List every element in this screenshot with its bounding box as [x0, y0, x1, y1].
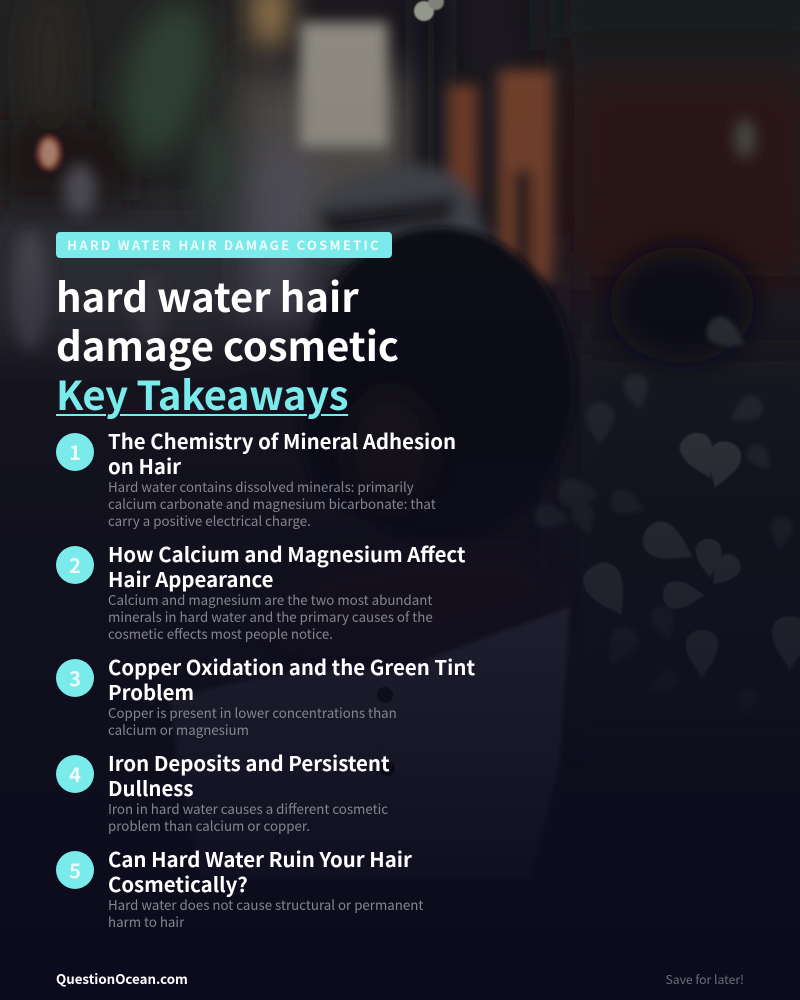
footer brand: QuestionOcean.com [56, 969, 188, 988]
takeaway 4: Iron Deposits and Persistent [108, 747, 390, 777]
takeaway 5: 5 [69, 855, 81, 884]
takeaway 4: Iron in hard water causes a different cosmetic [108, 799, 388, 818]
takeaway 1: 1 [69, 437, 81, 466]
takeaway 5 [56, 843, 424, 931]
face and skin [270, 390, 570, 650]
takeaway 3 [56, 651, 475, 739]
takeaway 4: Dullness [108, 772, 194, 802]
takeaway 5: Cosmetically? [108, 868, 248, 898]
takeaway 2: minerals in hard water and the primary causes of the [108, 607, 433, 626]
bokeh lights [414, 0, 444, 21]
shirt buttons [377, 687, 395, 776]
takeaway 4: problem than calcium or copper. [108, 816, 310, 835]
hair [300, 227, 575, 543]
takeaway 2: 2 [69, 550, 81, 579]
takeaway 1: calcium carbonate and magnesium bicarbonate: that [108, 494, 436, 513]
footer save note: Save for later! [665, 970, 744, 988]
takeaway 2: Hair Appearance [108, 563, 274, 593]
title: hard water hair [56, 266, 359, 324]
title: Key Takeaways [56, 364, 348, 422]
red light [36, 135, 62, 171]
takeaway 3: calcium or magnesium [108, 720, 249, 739]
takeaway 3: 3 [69, 663, 81, 692]
takeaway 4: 4 [69, 759, 81, 788]
takeaway 5: Hard water does not cause structural or permanent [108, 895, 423, 914]
takeaway 1: The Chemistry of Mineral Adhesion [108, 425, 456, 455]
takeaway 3: Problem [108, 676, 194, 706]
dim leaves [532, 312, 794, 717]
takeaway 1: carry a positive electrical charge. [108, 511, 311, 530]
dark bush [610, 247, 754, 363]
takeaway 2: Calcium and magnesium are the two most abundant [108, 590, 432, 609]
title: damage cosmetic [56, 315, 399, 373]
takeaway 3: Copper is present in lower concentrations than [108, 703, 397, 722]
takeaway 2: cosmetic effects most people notice. [108, 624, 333, 643]
takeaway 5: Can Hard Water Ruin Your Hair [108, 843, 412, 873]
takeaway 1: on Hair [108, 450, 181, 480]
takeaway 5: harm to hair [108, 912, 184, 931]
takeaway 1 [56, 425, 456, 530]
takeaway 1: Hard water contains dissolved minerals: primarily [108, 477, 414, 496]
white top [170, 607, 570, 880]
takeaway 2 [56, 538, 466, 643]
takeaway 3: Copper Oxidation and the Green Tint [108, 651, 475, 681]
takeaway 2: How Calcium and Magnesium Affect [108, 538, 466, 568]
takeaway 4 [56, 747, 390, 835]
title [56, 266, 399, 422]
main leaves [577, 428, 800, 678]
badge [56, 232, 392, 258]
badge: HARD WATER HAIR DAMAGE COSMETIC [67, 235, 381, 254]
